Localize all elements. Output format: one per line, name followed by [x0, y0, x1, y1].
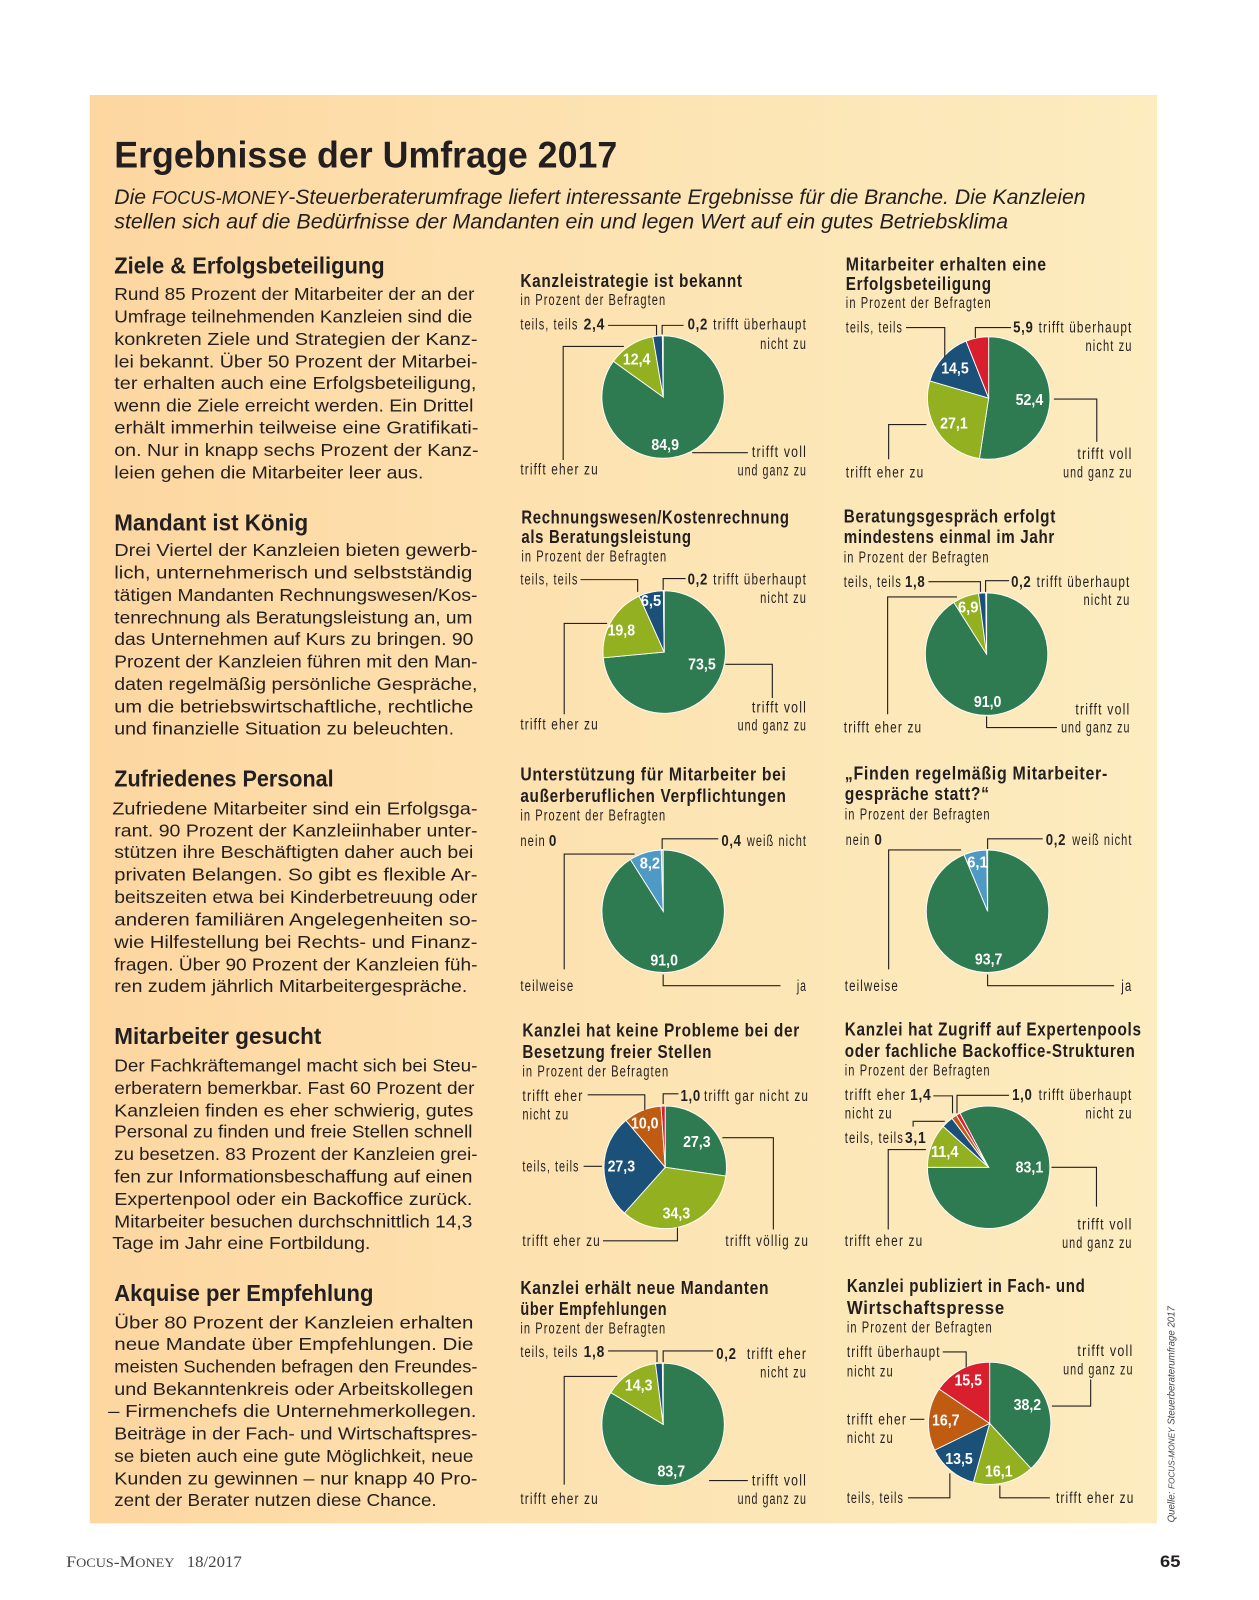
chart: Kanzlei hat keine Probleme: 34,3 — [663, 1205, 690, 1222]
chart title: in Prozent der Befragten — [520, 1321, 666, 1338]
labels: trifft voll — [1077, 446, 1132, 463]
footer: magazine name: 18/2017 — [187, 1554, 242, 1571]
labels: nicht zu — [845, 1105, 893, 1122]
labels — [520, 317, 807, 480]
pie chart — [927, 337, 1050, 459]
labels: trifft überhaupt — [847, 1344, 941, 1361]
labels: trifft eher zu — [844, 720, 922, 737]
paragraph: Über 80 Prozent der Kanzleien erhalten — [114, 1312, 473, 1332]
chart: Kanzlei publiziert in Fachpresse: 38,2 — [1014, 1397, 1041, 1414]
chart: Kanzlei erhält neue Mandanten: 83,7 — [658, 1463, 685, 1480]
paragraph: Drei Viertel der Kanzleien bieten gewerb- — [114, 540, 478, 560]
labels: nein — [520, 833, 546, 850]
paragraph: rant. 90 Prozent der Kanzleiinhaber unter- — [114, 821, 478, 841]
pie chart — [926, 850, 1049, 972]
paragraph: zent der Berater nutzen diese Chance. — [114, 1490, 437, 1510]
labels: 0 — [549, 833, 557, 850]
chart: Rechnungswesen/Kostenrechnung: 6,5 — [641, 593, 662, 610]
chart title — [845, 763, 1108, 823]
labels: nicht zu — [1086, 1105, 1132, 1122]
chart: Kanzlei publiziert in Fachpresse: 16,1 — [985, 1463, 1013, 1480]
labels: teils, teils — [844, 574, 902, 591]
paragraph: Umfrage teilnehmenden Kanzleien sind die — [114, 307, 472, 327]
labels: nicht zu — [760, 590, 807, 607]
labels: trifft voll — [1077, 1343, 1134, 1360]
labels: teils, teils — [520, 317, 578, 334]
chart: Kanzleistrategie ist bekannt — [520, 270, 807, 480]
pie chart — [927, 1106, 1050, 1228]
labels: weiß nicht — [1072, 832, 1132, 849]
labels: nicht zu — [522, 1106, 569, 1123]
paragraph: fen zur Informationsbeschaffung auf einen — [114, 1167, 472, 1187]
chart title — [846, 253, 1047, 312]
labels: teils, teils — [846, 320, 903, 337]
labels: trifft eher zu — [520, 462, 599, 479]
chart title: außerberuflichen Verpflichtungen — [520, 785, 787, 806]
chart title: oder fachliche Backoffice-Strukturen — [845, 1040, 1136, 1061]
chart title: Kanzlei publiziert in Fach- und — [847, 1275, 1086, 1296]
chart title — [844, 505, 1056, 566]
pie chart — [602, 850, 724, 972]
chart: Finden regelmäßig Mitarbeitergespräche statt — [845, 763, 1132, 995]
pie chart — [604, 1106, 726, 1229]
footer: page number: 65 — [1160, 1553, 1180, 1571]
labels: und ganz zu — [1061, 720, 1130, 737]
chart: Beratungsgespräch erfolgt — [844, 505, 1130, 737]
paragraph: privaten Belangen. So gibt es flexible Ar- — [114, 865, 478, 885]
labels: teils, teils — [847, 1490, 904, 1507]
paragraph: konkreten Ziele und Strategien der Kanz- — [114, 329, 478, 349]
intro text — [114, 185, 1086, 234]
paragraph: fragen. Über 90 Prozent der Kanzleien füh- — [114, 954, 478, 974]
paragraph: neue Mandate über Empfehlungen. Die — [114, 1334, 473, 1354]
chart: Kanzlei hat keine Probleme: 10,0 — [631, 1116, 659, 1133]
chart title: Mitarbeiter erhalten eine — [846, 253, 1047, 274]
paragraph: ter erhalten auch eine Erfolgsbeteiligung, — [114, 373, 476, 393]
labels: 1,0 — [681, 1088, 701, 1105]
labels: weiß nicht — [746, 833, 807, 850]
paragraph: on. Nur in knapp sechs Prozent der Kanz- — [114, 440, 479, 460]
labels: und ganz zu — [1063, 465, 1132, 482]
chart title — [520, 1277, 769, 1338]
paragraph: wie Hilfestellung bei Rechts- und Finanz- — [113, 932, 478, 952]
paragraph: erhält immerhin teilweise eine Gratifikati- — [114, 418, 479, 438]
chart title: Kanzlei hat keine Probleme bei der — [522, 1020, 800, 1041]
labels: 1,0 — [1012, 1087, 1033, 1104]
chart: Mitarbeiter erhalten eine Erfolgsbeteiligung: 14,5 — [941, 361, 969, 378]
labels: trifft eher zu — [1056, 1490, 1135, 1507]
labels: trifft eher zu — [520, 1491, 599, 1508]
labels: nein — [846, 832, 870, 849]
paragraph: wenn die Ziele erreicht werden. Ein Drittel — [113, 395, 473, 415]
labels: trifft eher zu — [522, 1233, 601, 1250]
labels: 1,8 — [584, 1344, 605, 1361]
labels: trifft überhaupt — [713, 317, 807, 334]
chart: Mitarbeiter erhalten eine Erfolgsbeteiligung: 27,1 — [940, 416, 968, 433]
labels: 1,4 — [910, 1087, 931, 1104]
labels — [520, 1344, 807, 1508]
chart: Unterstützung für Mitarbeiter: 8,2 — [640, 855, 660, 872]
heading: Ziele & Erfolgsbeteiligung — [114, 253, 385, 279]
labels: und ganz zu — [738, 463, 807, 480]
labels: 0,2 — [716, 1346, 737, 1363]
paragraph: um die betriebswirtschaftliche, rechtliche — [114, 696, 473, 716]
heading: Akquise per Empfehlung — [114, 1280, 373, 1306]
chart title — [520, 764, 787, 824]
chart: Finden regelmäßig Mitarbeitergespräche statt: 93,7 — [975, 951, 1002, 968]
paragraph: Prozent der Kanzleien führen mit den Man- — [114, 651, 478, 671]
labels: nicht zu — [847, 1363, 894, 1380]
labels: trifft eher — [847, 1411, 907, 1428]
labels: teilweise — [520, 978, 574, 995]
chart title: Besetzung freier Stellen — [522, 1041, 712, 1062]
labels: 2,4 — [584, 317, 605, 334]
chart: Beratungsgespräch erfolgt: 6,9 — [958, 599, 978, 616]
chart title: als Beratungsleistung — [521, 526, 692, 547]
labels: trifft überhaupt — [1039, 320, 1132, 337]
text section: Mitarbeiter gesucht — [112, 1023, 478, 1253]
labels — [846, 320, 1132, 482]
chart title: mindestens einmal im Jahr — [844, 526, 1055, 547]
paragraph: se bieten auch eine gute Möglichkeit, neue — [114, 1446, 473, 1466]
chart title — [847, 1275, 1086, 1337]
chart: Mitarbeiter erhalten eine Erfolgsbeteiligung: 52,4 — [1016, 392, 1044, 409]
paragraph: und Bekanntenkreis oder Arbeitskollegen — [114, 1379, 473, 1399]
chart title: in Prozent der Befragten — [844, 549, 990, 566]
pie chart — [925, 593, 1048, 715]
labels: trifft überhaupt — [713, 572, 807, 589]
labels: teils, teils — [845, 1130, 904, 1147]
chart: Kanzlei publiziert in Fachpresse: 13,5 — [945, 1451, 973, 1468]
chart title: in Prozent der Befragten — [846, 295, 992, 312]
labels — [844, 574, 1130, 737]
paragraph: Mitarbeiter besuchen durchschnittlich 14,3 — [114, 1211, 472, 1231]
chart: Finden regelmäßig Mitarbeitergespräche statt: 6,1 — [967, 854, 988, 871]
labels: 1,8 — [905, 574, 925, 591]
chart title — [845, 1019, 1142, 1079]
source note: Quelle: FOCUS-MONEY Steuerberaterumfrage 2017 — [1166, 1306, 1177, 1522]
chart: Rechnungswesen/Kostenrechnung: 73,5 — [688, 656, 716, 673]
paragraph: das Unternehmen auf Kurs zu bringen. 90 — [114, 629, 473, 649]
labels: 0,2 — [1011, 574, 1031, 591]
labels: trifft eher zu — [845, 1233, 923, 1250]
chart title: in Prozent der Befragten — [520, 292, 666, 309]
chart title: in Prozent der Befragten — [522, 1063, 669, 1080]
labels: nicht zu — [1086, 338, 1132, 355]
chart title: über Empfehlungen — [520, 1298, 667, 1319]
labels: teils, teils — [520, 572, 578, 589]
paragraph: ren zudem jährlich Mitarbeitergespräche. — [114, 976, 467, 996]
intro text: Die FOCUS-MONEY-Steuerberaterumfrage liefert interessante Ergebnisse für die Branche. Die Kanzleien — [114, 185, 1086, 209]
paragraph: erberatern bemerkbar. Fast 60 Prozent der — [114, 1078, 474, 1098]
paragraph: beitszeiten etwa bei Kinderbetreuung oder — [114, 887, 478, 907]
labels: und ganz zu — [1062, 1235, 1132, 1252]
chart title — [522, 1020, 800, 1080]
paragraph — [112, 1055, 478, 1253]
pie chart — [602, 1363, 724, 1486]
paragraph: Der Fachkräftemangel macht sich bei Steu- — [114, 1055, 478, 1075]
chart: Kanzlei publiziert in Fachpresse — [847, 1275, 1135, 1507]
paragraph: anderen familiären Angelegenheiten so- — [114, 909, 478, 929]
labels: trifft eher — [522, 1088, 584, 1105]
labels: 3,1 — [905, 1130, 926, 1147]
labels: trifft voll — [752, 699, 807, 716]
labels: trifft eher zu — [520, 717, 599, 734]
paragraph: zu besetzen. 83 Prozent der Kanzleien grei- — [114, 1144, 478, 1164]
paragraph — [112, 798, 478, 996]
chart: Kanzlei hat Zugriff auf Expertenpools: 11,4 — [931, 1144, 959, 1161]
paragraph: lei bekannt. Über 50 Prozent der Mitarbei- — [114, 351, 478, 371]
chart: Kanzlei erhält neue Mandanten — [520, 1277, 807, 1508]
paragraph: tätigen Mandanten Rechnungswesen/Kos- — [114, 585, 478, 605]
labels — [522, 1088, 809, 1250]
labels — [845, 1087, 1132, 1252]
paragraph: stützen ihre Beschäftigten daher auch bei — [114, 842, 473, 862]
chart: Kanzlei erhält neue Mandanten: 14,3 — [625, 1378, 652, 1395]
chart title: in Prozent der Befragten — [521, 548, 667, 565]
labels: 5,9 — [1013, 320, 1034, 337]
pie chart — [603, 591, 725, 713]
chart title: Beratungsgespräch erfolgt — [844, 505, 1056, 526]
heading: Mitarbeiter gesucht — [114, 1023, 322, 1049]
paragraph: Beiträge in der Fach- und Wirtschaftspres- — [114, 1424, 478, 1444]
chart title: in Prozent der Befragten — [520, 807, 666, 824]
labels — [845, 832, 1132, 995]
labels: trifft überhaupt — [1037, 574, 1130, 591]
pie chart — [602, 336, 724, 458]
labels: trifft überhaupt — [1039, 1087, 1132, 1104]
chart: Rechnungswesen/Kostenrechnung: 19,8 — [608, 623, 636, 640]
paragraph: Rund 85 Prozent der Mitarbeiter der an der — [114, 284, 474, 304]
chart title: Rechnungswesen/Kostenrechnung — [521, 507, 790, 528]
labels: 0,4 — [721, 833, 742, 850]
paragraph: Personal zu finden und freie Stellen schnell — [114, 1122, 472, 1142]
chart: Kanzlei publiziert in Fachpresse: 15,5 — [954, 1373, 982, 1390]
labels: nicht zu — [760, 1364, 807, 1381]
chart title: Unterstützung für Mitarbeiter bei — [520, 764, 787, 785]
labels: ja — [796, 978, 807, 995]
paragraph: Tage im Jahr eine Fortbildung. — [112, 1233, 370, 1253]
labels: teilweise — [845, 978, 899, 995]
chart: Unterstützung für Mitarbeiter — [520, 764, 807, 995]
labels: trifft voll — [1075, 701, 1130, 718]
chart: Kanzlei publiziert in Fachpresse: 16,7 — [932, 1412, 960, 1429]
paragraph: tenrechnung als Beratungsleistung an, um — [114, 607, 472, 627]
labels: trifft voll — [752, 1473, 807, 1490]
chart: Beratungsgespräch erfolgt: 91,0 — [974, 694, 1001, 711]
chart title — [520, 270, 743, 309]
chart title: in Prozent der Befragten — [847, 1320, 993, 1337]
labels: 0,2 — [688, 317, 708, 334]
chart: Kanzlei hat keine Probleme: 27,3 — [608, 1158, 635, 1175]
paragraph — [114, 540, 478, 739]
labels: trifft eher — [747, 1346, 807, 1363]
chart title: „Finden regelmäßig Mitarbeiter- — [845, 763, 1108, 784]
labels: trifft völlig zu — [725, 1233, 809, 1250]
chart title: Erfolgsbeteiligung — [846, 273, 992, 294]
labels: nicht zu — [1084, 592, 1130, 609]
labels: und ganz zu — [1063, 1361, 1134, 1378]
labels — [520, 833, 807, 995]
heading: Zufriedenes Personal — [114, 766, 334, 792]
labels: trifft voll — [1077, 1217, 1132, 1234]
heading: Mandant ist König — [114, 510, 308, 536]
labels: und ganz zu — [738, 718, 807, 735]
chart title: Kanzlei hat Zugriff auf Expertenpools — [845, 1019, 1142, 1040]
chart: Kanzlei hat keine Probleme — [522, 1020, 809, 1250]
chart: Kanzlei hat keine Probleme: 27,3 — [683, 1134, 711, 1151]
paragraph: Kunden zu gewinnen – nur knapp 40 Pro- — [114, 1469, 478, 1489]
labels: nicht zu — [847, 1430, 894, 1447]
text section: Mandant ist König — [114, 510, 478, 739]
labels: trifft eher — [845, 1087, 906, 1104]
panel: background — [90, 95, 1157, 1523]
chart: Kanzleistrategie ist bekannt: 84,9 — [651, 437, 679, 454]
labels: 0,2 — [1046, 832, 1066, 849]
text section: Ziele und Erfolgsbeteiligung — [113, 253, 479, 483]
chart: Unterstützung für Mitarbeiter: 91,0 — [650, 952, 678, 969]
paragraph — [113, 284, 479, 483]
chart: Kanzlei hat Zugriff auf Expertenpools: 83,1 — [1016, 1159, 1044, 1176]
footer: magazine name — [66, 1554, 242, 1571]
paragraph: Kanzleien finden es eher schwierig, gutes — [114, 1100, 473, 1120]
chart: Rechnungswesen/Kostenrechnung — [520, 507, 807, 735]
paragraph — [108, 1312, 478, 1510]
chart: Mitarbeiter erhalten eine Erfolgsbeteiligung — [846, 253, 1132, 482]
labels: trifft voll — [752, 444, 807, 461]
labels: trifft eher zu — [846, 465, 924, 482]
paragraph: – Firmenchefs die Unternehmerkollegen. — [108, 1401, 476, 1421]
paragraph: Expertenpool oder ein Backoffice zurück. — [114, 1189, 472, 1209]
labels: und ganz zu — [738, 1491, 807, 1508]
labels: ja — [1121, 978, 1132, 995]
labels: 0 — [874, 832, 883, 849]
chart title: in Prozent der Befragten — [845, 806, 991, 823]
labels — [520, 572, 807, 735]
labels: teils, teils — [522, 1158, 580, 1175]
intro text: stellen sich auf die Bedürfnisse der Mandanten ein und legen Wert auf ein gutes Betriebsklima — [114, 210, 1008, 234]
paragraph: leien gehen die Mitarbeiter leer aus. — [114, 463, 423, 483]
chart title — [521, 507, 790, 565]
chart title: Wirtschaftspresse — [847, 1297, 1005, 1318]
paragraph: daten regelmäßig persönliche Gespräche, — [114, 674, 477, 694]
footer: magazine name: FOCUS -MONEY — [66, 1554, 175, 1571]
paragraph: meisten Suchenden befragen den Freundes- — [114, 1356, 478, 1376]
paragraph: und finanzielle Situation zu beleuchten. — [114, 719, 454, 739]
text section: Zufriedenes Personal — [112, 766, 478, 996]
labels — [847, 1343, 1135, 1507]
pie chart — [928, 1362, 1051, 1485]
chart title: gespräche statt?“ — [845, 783, 990, 804]
paragraph: lich, unternehmerisch und selbstständig — [114, 563, 472, 583]
labels: 0,2 — [688, 572, 708, 589]
title: Ergebnisse der Umfrage 2017 — [114, 134, 617, 175]
chart: Kanzlei hat Zugriff auf Expertenpools — [845, 1019, 1142, 1252]
labels: nicht zu — [760, 336, 807, 353]
text section: Akquise per Empfehlung — [108, 1280, 478, 1510]
chart title: Kanzlei erhält neue Mandanten — [520, 1277, 769, 1298]
chart: Kanzleistrategie ist bekannt: 12,4 — [623, 351, 651, 368]
chart title: Kanzleistrategie ist bekannt — [520, 270, 743, 291]
labels: teils, teils — [520, 1344, 578, 1361]
chart title: in Prozent der Befragten — [845, 1062, 991, 1079]
paragraph: Zufriedene Mitarbeiter sind ein Erfolgsga- — [112, 798, 478, 818]
labels: trifft gar nicht zu — [704, 1088, 809, 1105]
